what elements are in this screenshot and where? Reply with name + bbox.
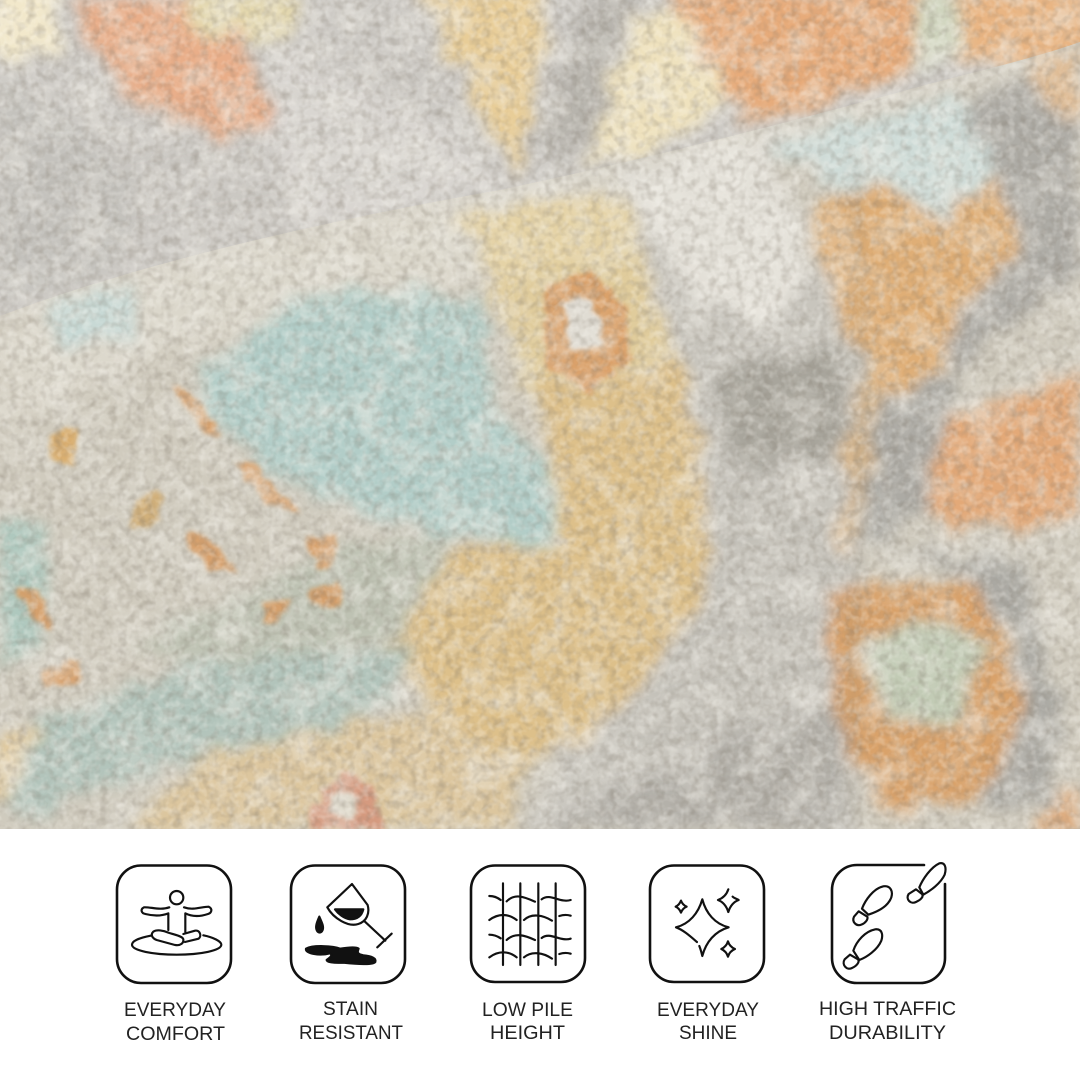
weft stripes on grey column [590,475,850,790]
label: stain resistant: RESISTANT [299,1023,403,1044]
cream mottling over colour areas [0,0,1080,829]
label: low pile height [482,1000,573,1044]
grey column [558,292,836,802]
icon: low pile height [471,866,585,982]
orange flecks [18,270,630,829]
label: everyday comfort: EVERYDAY [124,1000,226,1021]
icon: stain resistant [291,866,405,983]
label: high traffic durability: HIGH TRAFFIC [819,999,956,1020]
pale gold top [450,190,650,280]
label: stain resistant [299,999,403,1044]
carpet pile texture [0,0,1080,829]
label: stain resistant: STAIN [323,999,378,1020]
label: high traffic durability [819,999,956,1044]
label: low pile height: LOW PILE [482,1000,573,1021]
feature panel [0,829,1080,1080]
icon: high traffic durability [832,863,946,983]
pale top-left [0,217,490,421]
icon: everyday shine [650,866,764,982]
label: everyday comfort: COMFORT [126,1024,225,1045]
label: everyday shine [657,1000,759,1044]
gold centre [385,360,710,790]
label: everyday comfort [124,1000,226,1045]
fold highlight [0,46,1080,320]
woven stripes on background [0,70,480,270]
label: low pile height: HEIGHT [490,1023,565,1044]
photo: rolled rug close-up [0,0,1080,830]
icon: everyday comfort [117,866,231,983]
rug rolled front section [0,30,1080,830]
column fold shadow [850,160,862,829]
rug background section behind fold [0,0,1080,340]
right section [770,100,1000,235]
label: high traffic durability: DURABILITY [829,1023,946,1044]
label: everyday shine: EVERYDAY [657,1000,759,1021]
teal bands [200,290,555,555]
label: everyday shine: SHINE [679,1023,737,1044]
